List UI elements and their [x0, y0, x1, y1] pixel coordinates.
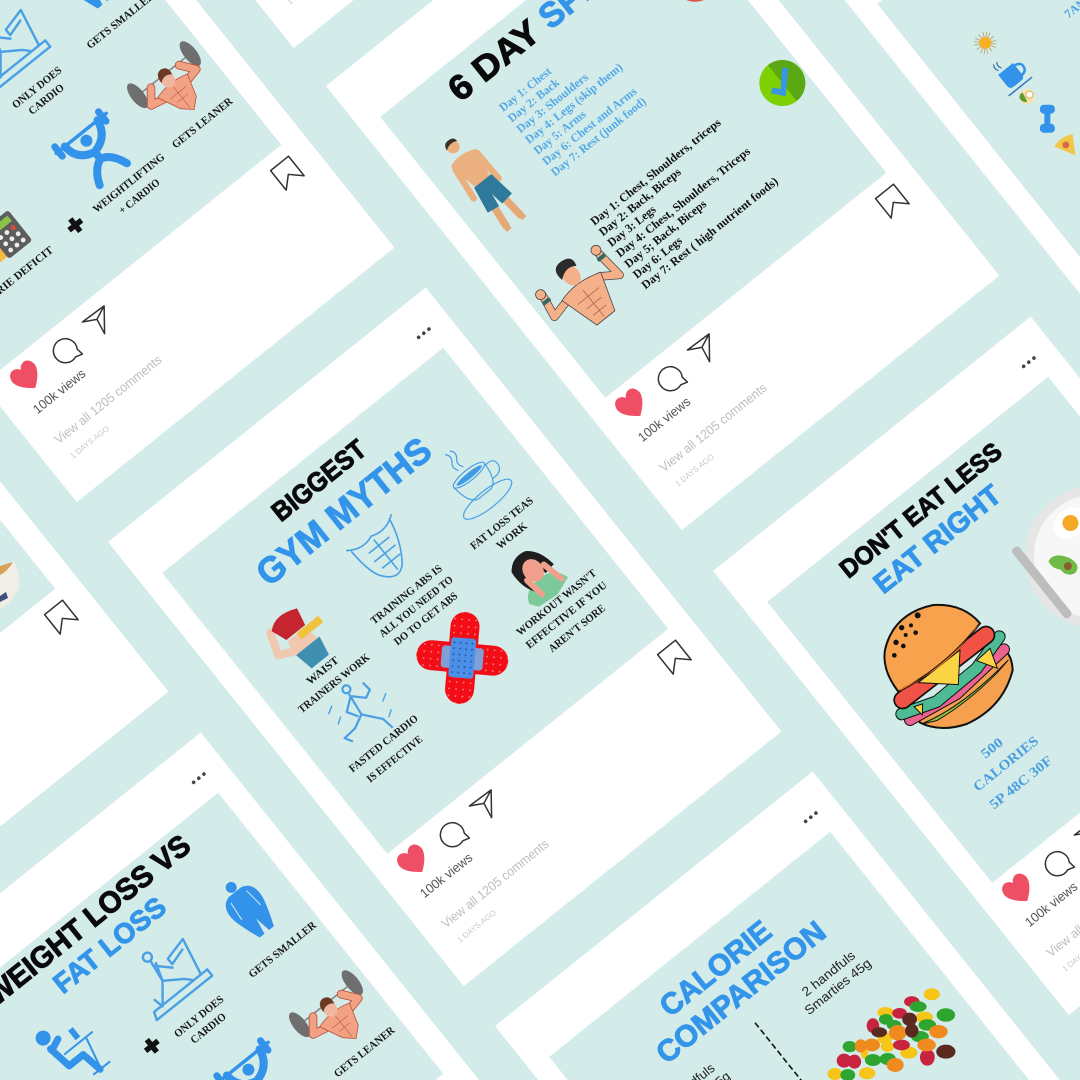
icon: treadmill [0, 0, 50, 91]
icon: plus [141, 1035, 163, 1057]
text: training abs claim: DO TO GET ABS [392, 590, 460, 648]
icon: red cross circle [663, 0, 727, 11]
text: calories and macros: 500 [978, 735, 1007, 762]
icon: food bowl [0, 561, 19, 609]
icon: sun [970, 27, 1001, 58]
icon: menu dots [416, 327, 431, 340]
heading: don't eat less eat right: DON'T EAT LESS [835, 438, 1007, 584]
text: date: 1 DAYS AGO [69, 424, 111, 461]
icon: comment bubble [436, 818, 470, 853]
text: only does cardio [10, 64, 74, 123]
icon: bookmark [658, 640, 691, 674]
heading: biggest gym myths: GYM MYTHS [248, 429, 439, 594]
icon: smarties pile [827, 988, 955, 1080]
text: skinny workout plan: Day 6: Chest and Arms [539, 84, 640, 168]
icon: waist trainer woman [260, 597, 341, 680]
text: gets leaner: GETS LEANER [170, 95, 236, 151]
icon: heart [612, 385, 651, 425]
icon: abs torso [347, 515, 423, 590]
icon: tea cup [426, 433, 517, 525]
icon: bookmark [45, 600, 78, 634]
icon: heart [7, 357, 46, 397]
panel: calorie comparison post [495, 772, 1080, 1080]
text: skinny workout plan: Day 1: Chest [496, 64, 554, 114]
text: weightlifting + cardio: WEIGHTLIFTING [91, 151, 167, 216]
text: gets smaller: GETS SMALLER [246, 919, 320, 981]
icon: send arrow [687, 333, 723, 368]
text: weightlifting + cardio: + CARDIO [117, 176, 163, 217]
heading: biggest gym myths: BIGGEST [266, 434, 372, 527]
text: smarties quantity [791, 943, 874, 1018]
icon: pizza slice [1053, 131, 1080, 162]
text: calories and macros [958, 717, 1057, 814]
icon: plus [64, 214, 87, 236]
icon: comment bubble [1041, 847, 1075, 882]
icon: person eating at desk [20, 1006, 123, 1080]
text: only does cardio: ONLY DOES [172, 993, 226, 1040]
text: skinny workout plan: Day 2: Back [505, 75, 562, 125]
icon: menu dots [191, 772, 206, 785]
heading: calorie comparison: COMPARISON [650, 915, 832, 1070]
text: only does cardio: ONLY DOES [10, 64, 64, 111]
text: smarties quantity: 2 handfuls [799, 947, 858, 999]
icon: blue weightlifter [52, 109, 139, 194]
text: views: 100k views [417, 849, 476, 901]
heading: don't eat less eat right: EAT RIGHT [868, 479, 1008, 600]
icon: menu dots [803, 811, 818, 824]
text: workout soreness claim [514, 567, 620, 665]
icon: heart [999, 870, 1038, 910]
icon: bodybuilder with barbell [123, 38, 224, 136]
icon: send arrow [469, 789, 505, 824]
icon: comment bubble [654, 362, 688, 397]
text: muscular workout plan: Day 1: Chest, Shoulders, triceps [588, 115, 724, 228]
icon: coffee mug [987, 51, 1032, 96]
text: fat loss teas work: FAT LOSS TEAS [468, 495, 536, 552]
text: workout soreness claim: AREN'T SORE [547, 602, 608, 655]
text: date: 1 DAYS AGO [456, 908, 498, 945]
text: muscular workout plan: Day 2: Back, Biceps [596, 165, 684, 239]
text: waist trainers work: WAIST [304, 654, 342, 688]
icon: healthy plate [996, 457, 1080, 656]
text: training abs claim: ALL YOU NEED TO [377, 574, 456, 640]
icon: muscular man [529, 237, 637, 344]
panel: don't eat less post [713, 317, 1080, 1015]
text: skinny workout plan: Day 4: Legs (skip them) [522, 60, 625, 147]
text: workout soreness claim: EFFECTIVE IF YOU [524, 579, 609, 651]
icon: breakfast plate [1017, 86, 1038, 107]
text: fasted cardio: FASTED CARDIO [347, 712, 421, 775]
text: comments link: View all 1205 comments [438, 836, 552, 931]
text: only does cardio: CARDIO [188, 1011, 229, 1046]
text: left quantity [661, 1056, 733, 1080]
text: views: 100k views [1022, 878, 1080, 930]
icon: dumbbell [1040, 105, 1055, 133]
text: comments link: View all 1205 comments [51, 352, 165, 447]
heading: calorie comparison: CALORIE [654, 914, 778, 1023]
icon: runner [319, 669, 405, 755]
text: muscular workout plan: Day 4: Chest, Shoulders, Triceps [613, 144, 753, 260]
icon: plus [0, 106, 1, 128]
panel: weight loss vs fat loss post, lower copy [0, 733, 556, 1080]
text: muscular workout plan [588, 110, 781, 292]
icon: blue weightlifter [214, 1038, 301, 1080]
text: smarties quantity: Smarties 45g [801, 955, 874, 1018]
text: date: 1 DAYS AGO [674, 452, 716, 489]
text: only does cardio: CARDIO [26, 82, 67, 117]
text: only does cardio [172, 993, 236, 1052]
text: skinny workout plan [496, 28, 651, 179]
icon: bookmark [876, 184, 909, 218]
icon: obese figure [51, 0, 120, 15]
text: muscular workout plan: Day 6: Legs [630, 233, 685, 281]
icon: bookmark [271, 156, 304, 190]
panel: 6 day split post [326, 0, 999, 530]
icon: bandage [412, 608, 512, 708]
heading: 6 day split: 6 DAY [441, 12, 548, 109]
icon: slim man [435, 130, 529, 235]
text: views: 100k views [30, 365, 89, 417]
icon: send arrow [1074, 818, 1080, 853]
text: waist trainers work: TRAINERS WORK [296, 651, 373, 716]
icon: comment bubble [49, 334, 83, 369]
text: calories and macros: CALORIES [971, 734, 1042, 795]
text: skinny workout plan: Day 3: Shoulders [513, 70, 591, 136]
text: muscular workout plan: Day 3: Legs [605, 202, 659, 249]
icon: calculator [0, 210, 32, 268]
text: calories and macros: 5P 48C 30F [987, 754, 1056, 813]
icon: burger [884, 605, 1013, 728]
text: fat loss teas work: WORK [494, 520, 530, 552]
icon: menu dots [1021, 356, 1036, 369]
icon: heart [394, 841, 433, 881]
panel: left partial post [0, 248, 168, 946]
text: training abs claim [367, 562, 466, 652]
text: comments link: View all 1205 comments [656, 380, 770, 475]
panel: top-right daily schedule post [823, 0, 1080, 417]
icon: send arrow [82, 305, 118, 340]
heading: 6 day split [441, 0, 630, 109]
icon: sore woman [501, 540, 572, 612]
text: skinny workout plan: Day 5: Arms [531, 107, 589, 157]
text: workout soreness claim: WORKOUT WASN'T [514, 567, 599, 639]
text: training abs claim: TRAINING ABS IS [369, 563, 445, 627]
icon: green check circle [750, 51, 815, 115]
text: skinny workout plan: Day 7: Rest (junk food) [548, 94, 649, 179]
text: muscular workout plan: Day 7: Rest ( high nutrient foods) [639, 174, 781, 292]
text: fasted cardio: IS EFFECTIVE [365, 733, 425, 785]
icon: obese figure [213, 871, 282, 944]
text: muscular workout plan: Day 5; Back, Biceps [622, 196, 709, 271]
icon: bodybuilder with barbell [285, 967, 386, 1065]
heading: weight loss vs fat loss: FAT LOSS [47, 891, 172, 999]
divider: dashed line [755, 1023, 905, 1080]
panel: weight loss vs fat loss post, upper copy [0, 0, 394, 502]
panel: biggest gym myths post [108, 288, 781, 986]
text: views: 100k views [635, 393, 694, 445]
icon: treadmill [120, 929, 212, 1020]
text: gets leaner: GETS LEANER [332, 1024, 398, 1080]
